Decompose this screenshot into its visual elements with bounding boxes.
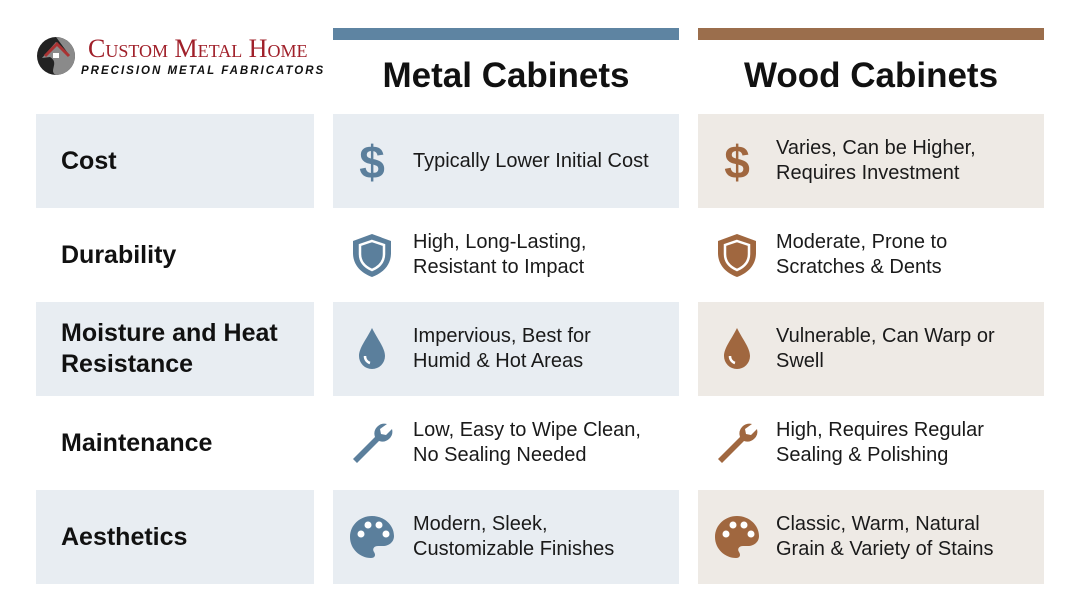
- text: Sealing & Polishing: [776, 444, 948, 466]
- header: wood: [698, 28, 1044, 95]
- text: Low, Easy to Wipe Clean,: [413, 419, 641, 441]
- row: aesthetics: [36, 490, 314, 584]
- text: Varies, Can be Higher,: [776, 137, 976, 159]
- header: wood: Wood Cabinets: [744, 56, 998, 95]
- text: Resistant to Impact: [413, 256, 584, 278]
- text: Typically Lower Initial Cost: [413, 150, 649, 172]
- text: Classic, Warm, Natural: [776, 513, 980, 535]
- text: Vulnerable, Can Warp or: [776, 325, 995, 347]
- logo text: Custom Metal Home: [88, 34, 307, 63]
- text: Modern, Sleek,: [413, 513, 548, 535]
- logo: [37, 34, 325, 77]
- header: metal: Metal Cabinets: [382, 56, 630, 95]
- text: Humid & Hot Areas: [413, 350, 583, 372]
- row: cost: [36, 114, 314, 208]
- row: moisture: [36, 302, 314, 396]
- text: High, Requires Regular: [776, 419, 984, 441]
- text: Grain & Variety of Stains: [776, 538, 994, 560]
- text: Swell: [776, 350, 824, 372]
- icon: logo mark: [37, 37, 75, 75]
- row: cost: Cost: [61, 146, 117, 174]
- logo: PRECISION METAL FABRICATORS: [81, 65, 325, 77]
- text: Customizable Finishes: [413, 538, 614, 560]
- row: aesthetics: Aesthetics: [61, 522, 187, 550]
- row: moisture: Moisture and Heat: [61, 319, 278, 347]
- text: Impervious, Best for: [413, 325, 591, 347]
- header: metal: [333, 28, 679, 95]
- row: durability: Durability: [61, 240, 176, 268]
- text: Scratches & Dents: [776, 256, 942, 278]
- row: maintenance: Maintenance: [61, 428, 212, 456]
- row: moisture: Resistance: [61, 350, 193, 378]
- text: High, Long-Lasting,: [413, 231, 586, 253]
- text: Moderate, Prone to: [776, 231, 947, 253]
- text: No Sealing Needed: [413, 444, 586, 466]
- text: Requires Investment: [776, 162, 959, 184]
